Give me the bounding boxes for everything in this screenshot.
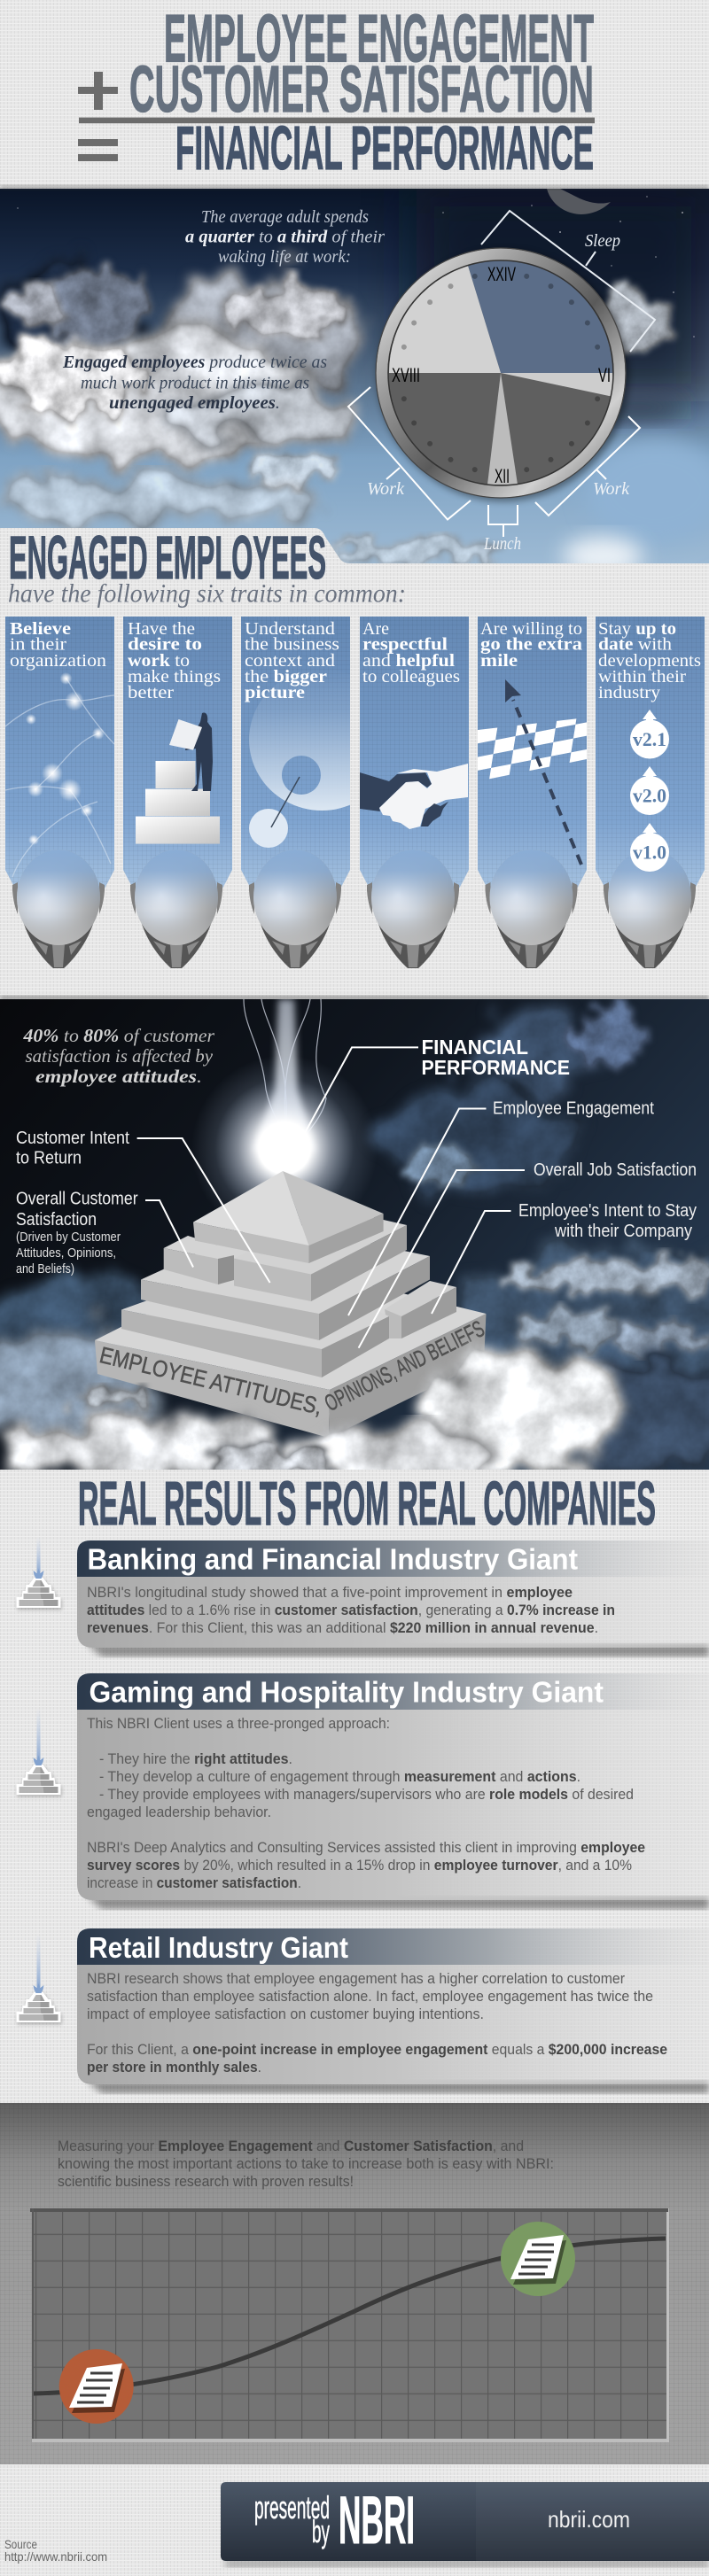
trait 6: up to date: date with bbox=[598, 635, 672, 655]
bracket: sleep: Sleep bbox=[585, 231, 620, 251]
source bbox=[4, 2537, 107, 2564]
panel: call to action bbox=[0, 2103, 709, 2464]
icon: plus sign bbox=[78, 72, 118, 110]
icon: mini pyramid banking bbox=[16, 1537, 62, 1610]
card heading bbox=[77, 1928, 709, 1965]
callout: 40 to 80 percent bbox=[22, 1025, 215, 1087]
source: Source bbox=[4, 2537, 37, 2551]
icon: version balloons: v1.0 bbox=[633, 842, 666, 863]
trait 6: up to date: industry bbox=[598, 683, 660, 702]
lightning and glow bbox=[198, 999, 370, 1214]
icon: puzzle disc and needle bbox=[249, 686, 350, 848]
card text: impact of employee satisfaction on customer buying intentions. bbox=[87, 2006, 484, 2022]
card text: survey scores by 20%, which resulted in a 15% drop in employee turnover, and a 10% bbox=[87, 1857, 632, 1874]
text: time at work: a quarter to a third of their bbox=[185, 228, 385, 247]
trait 5: go the extra mile: Are willing to bbox=[480, 619, 582, 639]
logo bbox=[254, 2483, 415, 2558]
stars bbox=[17, 196, 695, 338]
footer banner: NBRI bbox=[339, 2483, 415, 2558]
callout: 40 to 80 percent: 40% to 80% of customer bbox=[22, 1025, 215, 1046]
lunch wedge bbox=[487, 373, 518, 485]
icon: mini pyramid gaming bbox=[16, 1708, 62, 1796]
label: customer intent to return: to Return bbox=[16, 1149, 82, 1168]
base text: EMPLOYEE ATTITUDES, bbox=[97, 1341, 325, 1420]
icon: finish line checker bbox=[478, 718, 587, 781]
clock numerals: VI bbox=[598, 364, 611, 386]
heading tab: engaged employees bbox=[0, 524, 709, 709]
base text bbox=[97, 1315, 488, 1420]
chart: 24 hour clock bbox=[376, 248, 629, 501]
text: engaged employees produce twice as much bbox=[62, 353, 327, 413]
bracket: work left bbox=[348, 387, 471, 519]
pyramid cap bbox=[193, 1171, 308, 1245]
card text: - They hire the right attitudes. bbox=[99, 1750, 292, 1767]
panel: sky hero bbox=[0, 189, 709, 576]
trait 1: believe bbox=[5, 617, 114, 968]
label: employee engagement bbox=[348, 1098, 654, 1315]
logo: by bbox=[312, 2513, 330, 2549]
trait 5: go the extra mile: mile bbox=[480, 651, 518, 671]
text: measuring: scientific business research with proven results! bbox=[58, 2173, 354, 2190]
trait 3: bigger picture: Understand bbox=[245, 619, 335, 639]
base text: OPINIONS, AND BELIEFS bbox=[320, 1315, 488, 1416]
card text: NBRI's Deep Analytics and Consulting Services assisted this client in improving employee bbox=[87, 1839, 645, 1856]
icon: equals sign bbox=[78, 139, 118, 161]
label: financial performance: FINANCIAL bbox=[422, 1036, 528, 1059]
label: overall customer satisfaction: and Beliefs) bbox=[16, 1261, 74, 1276]
tier three bbox=[141, 1232, 430, 1288]
label: financial performance bbox=[300, 1036, 570, 1141]
trait 6: up to date: within their bbox=[598, 667, 686, 687]
label: employee engagement: Employee Engagement bbox=[493, 1098, 654, 1118]
source: http://www.nbrii.com bbox=[4, 2549, 107, 2564]
url: nbrii.com bbox=[548, 2506, 630, 2533]
card heading: Banking and Financial Industry Giant bbox=[87, 1543, 578, 1576]
text: time at work bbox=[185, 207, 385, 267]
trait 3: bigger picture: picture bbox=[245, 683, 305, 702]
trait 2: desire to work: desire to bbox=[128, 635, 202, 655]
card text: increase in customer satisfaction. bbox=[87, 1874, 301, 1891]
label: overall customer satisfaction: Satisfaction bbox=[16, 1210, 97, 1230]
callout: 40 to 80 percent: satisfaction is affected by bbox=[25, 1045, 214, 1067]
text: engaged employees produce twice as much: unengaged employees . bbox=[109, 393, 280, 413]
label: overall customer satisfaction: Attitudes, Opinions, bbox=[16, 1245, 116, 1261]
icon: version balloons bbox=[630, 710, 669, 872]
panel: pyramid shadow bbox=[0, 996, 709, 1000]
card text bbox=[87, 1584, 615, 1636]
text: time at work: waking life at work: bbox=[218, 247, 351, 267]
card text: This NBRI Client uses a three-pronged approach: bbox=[87, 1715, 390, 1732]
callout: 40 to 80 percent: employee attitudes . bbox=[35, 1066, 202, 1087]
trait 6: up to date: Stay up to bbox=[598, 619, 676, 639]
card text: - They develop a culture of engagement through measurement and actions. bbox=[99, 1768, 580, 1785]
text: measuring bbox=[58, 2138, 554, 2190]
trait 2: desire to work: Have the bbox=[128, 619, 195, 639]
free time wedges bbox=[501, 373, 613, 397]
chart: growth curve bbox=[30, 2208, 669, 2442]
marker: high point bbox=[501, 2222, 575, 2296]
trait 4: respectful and helpful bbox=[360, 617, 469, 968]
trait 3: bigger picture: context and bbox=[245, 651, 335, 671]
label: overall customer satisfaction: Overall Customer bbox=[16, 1190, 138, 1209]
icon: version balloons: v2.0 bbox=[633, 785, 666, 806]
bracket: lunch bbox=[484, 505, 521, 549]
hero top shadow bbox=[0, 185, 709, 190]
heading tab: engaged employees: have the following six traits in common: bbox=[8, 579, 406, 608]
marker: low point bbox=[59, 2349, 134, 2424]
clock numerals: XVIII bbox=[392, 364, 420, 386]
card heading: Retail Industry Giant bbox=[89, 1931, 348, 1964]
trait 1: believe: in their bbox=[10, 635, 66, 655]
trait 6: up to date: developments bbox=[598, 651, 701, 671]
trait 1: believe: organization bbox=[10, 651, 106, 671]
trait 4: respectful and helpful: to colleagues bbox=[362, 667, 460, 687]
trait 2: desire to work bbox=[123, 617, 232, 968]
trait 3: bigger picture: the bigger bbox=[245, 667, 327, 687]
label: overall job satisfaction bbox=[359, 1160, 697, 1348]
card text: NBRI's longitudinal study showed that a five-point improvement in employee bbox=[87, 1584, 573, 1601]
icon: man stacking blocks bbox=[136, 713, 220, 844]
trait 4: respectful and helpful: and helpful bbox=[362, 651, 455, 671]
footer banner bbox=[221, 2482, 709, 2567]
card text: satisfaction than employee satisfaction alone. In fact, employee engagement has twice the bbox=[87, 1988, 653, 2005]
card text: engaged leadership behavior. bbox=[87, 1804, 271, 1820]
trait 2: desire to work: make things bbox=[128, 667, 221, 687]
trait 5: go the extra mile bbox=[478, 617, 587, 968]
panel: pyramid of drivers bbox=[0, 999, 709, 1484]
panel: six traits bbox=[5, 617, 705, 968]
icon: handshake bbox=[360, 764, 468, 829]
trait 4: respectful and helpful: Are bbox=[362, 619, 389, 639]
clock numerals: XXIV bbox=[487, 263, 516, 285]
label: customer intent to return: Customer Intent bbox=[16, 1129, 129, 1148]
pyramid base bbox=[95, 1286, 486, 1390]
card: retail bbox=[77, 1928, 709, 2093]
trait 5: go the extra mile: go the extra bbox=[480, 635, 582, 655]
card text: attitudes led to a 1.6% rise in customer satisfaction, generating a 0.7% increase in bbox=[87, 1602, 615, 1618]
icon: crescent moon bbox=[547, 189, 611, 214]
card text: For this Client, a one-point increase in employee engagement equals a $200,000 increase bbox=[87, 2041, 667, 2058]
text: measuring: knowing the most important actions to take to increase both is easy with NBRI: bbox=[58, 2155, 554, 2172]
label: customer intent to return bbox=[16, 1129, 270, 1283]
bracket: work right bbox=[535, 416, 640, 516]
bracket: work right: Work bbox=[593, 479, 630, 499]
label: overall customer satisfaction bbox=[16, 1190, 193, 1276]
bracket: lunch: Lunch bbox=[483, 534, 521, 554]
trait 2: desire to work: work to bbox=[128, 651, 190, 671]
icon: dashed arrow bbox=[505, 679, 581, 865]
trait 4: respectful and helpful: respectful bbox=[362, 635, 448, 655]
card heading: Gaming and Hospitality Industry Giant bbox=[89, 1676, 604, 1709]
hour dots bbox=[401, 273, 601, 473]
card text: per store in monthly sales. bbox=[87, 2059, 261, 2076]
clock rim bbox=[382, 254, 619, 492]
label: intent to stay bbox=[432, 1201, 697, 1314]
tier two right block bbox=[234, 1209, 407, 1274]
card text: revenues. For this Client, this was an additional $220 million in annual revenue. bbox=[87, 1619, 598, 1636]
text: time at work: The average adult spends bbox=[201, 207, 369, 227]
sky clouds bbox=[0, 266, 709, 576]
bracket: work left: Work bbox=[367, 479, 405, 499]
label: financial performance: PERFORMANCE bbox=[422, 1056, 570, 1079]
card text: NBRI research shows that employee engagement has a higher correlation to customer bbox=[87, 1970, 625, 1987]
card text: - They provide employees with managers/supervisors who are role models of desired bbox=[99, 1786, 634, 1803]
trait 3: bigger picture: the business bbox=[245, 635, 339, 655]
clock numerals: XII bbox=[495, 465, 510, 487]
icon: constellation bbox=[5, 672, 114, 877]
title bbox=[78, 2, 595, 182]
icon: version balloons: v2.1 bbox=[633, 728, 666, 750]
label: overall customer satisfaction: (Driven by Customer bbox=[16, 1230, 121, 1245]
card text bbox=[87, 1715, 645, 1891]
icon: mini pyramid retail bbox=[16, 1934, 62, 2024]
text: measuring: Measuring your Employee Engagement and Customer Satisfaction, and bbox=[58, 2138, 524, 2154]
pyramid bbox=[95, 1171, 486, 1438]
label: intent to stay: with their Company bbox=[554, 1222, 692, 1241]
text: engaged employees produce twice as much: Engaged employees produce twice as bbox=[62, 353, 327, 372]
card text bbox=[87, 1970, 667, 2076]
trait 6: up to date bbox=[596, 617, 705, 968]
storm clouds bbox=[0, 1005, 709, 1470]
trait 1: believe: Believe bbox=[10, 619, 71, 639]
sleep wedge bbox=[468, 260, 612, 373]
trait 3: bigger picture bbox=[241, 617, 350, 968]
foreground clouds bbox=[4, 1345, 620, 1484]
trait 2: desire to work: better bbox=[128, 683, 174, 702]
heading tab: engaged employees: ENGAGED EMPLOYEES bbox=[9, 524, 326, 592]
clock numerals bbox=[392, 263, 611, 487]
card: banking bbox=[77, 1540, 709, 1657]
tier two left block bbox=[164, 1236, 244, 1259]
tier four bbox=[121, 1288, 388, 1318]
base right block bbox=[408, 1281, 456, 1300]
text: engaged employees produce twice as much: much work product in this time as bbox=[81, 374, 309, 393]
card: gaming bbox=[77, 1673, 709, 1909]
bracket: sleep bbox=[481, 211, 655, 352]
curve bbox=[34, 2238, 666, 2394]
logo: presented bbox=[254, 2489, 330, 2526]
